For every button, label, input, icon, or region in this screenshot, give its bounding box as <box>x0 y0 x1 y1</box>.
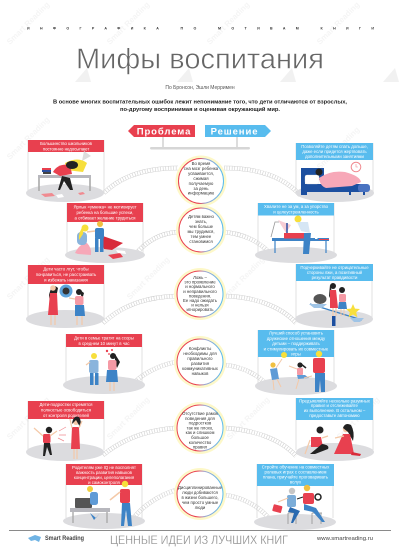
circle: myth 3: Ложь – <box>193 275 208 280</box>
watermark pattern: Smart Reading <box>315 125 361 171</box>
problem 2 text: а отбивает желание трудиться <box>74 216 136 220</box>
watermark pattern <box>5 0 399 441</box>
circle: myth 1 <box>176 156 226 206</box>
circle: myth 3 <box>174 268 226 320</box>
brand name: Smart Reading <box>45 536 84 542</box>
problem 5 text <box>28 401 104 419</box>
title: Мифы воспитания <box>76 44 324 76</box>
problem 1 text <box>28 140 104 152</box>
panel: solution 6 <box>254 464 336 530</box>
panel: problem 4 <box>63 334 145 394</box>
circle: myth 3: и неправильного <box>183 289 217 294</box>
panel: solution 4 <box>255 330 337 395</box>
circle: myth 5: как и слишком <box>186 430 214 435</box>
circle: myth 1: получаемую <box>189 181 214 186</box>
circle: myth 5: количество <box>189 440 212 445</box>
panel: problem 6 <box>63 464 145 529</box>
problem 3 text: Дети часто лгут, чтобы <box>43 266 89 272</box>
circle: myth 5: Отсутствие рамок <box>182 411 218 416</box>
solution 1 text: Позволяйте детям спать дольше, <box>301 144 368 149</box>
circle: myth 1: информацию <box>188 190 215 196</box>
watermark pattern: Smart Reading <box>5 0 51 46</box>
circle: myth 4: Конфликты <box>189 346 211 351</box>
footer <box>9 530 391 547</box>
column headers <box>128 125 271 150</box>
circle: myth 5: большое <box>191 435 209 440</box>
circle: myth 4: правильного <box>187 356 213 361</box>
solution 6 text <box>257 464 334 486</box>
solution 2 text: Хвалите не за ум, а за упорство <box>264 204 329 209</box>
panel: problem 5 <box>26 401 104 461</box>
illustration: family playing with a ball <box>270 351 325 392</box>
solution 4 text: дружеские отношения между <box>267 336 326 341</box>
circle: myth 6 <box>174 468 226 520</box>
illustration: teen and mother talking on floor <box>305 424 361 456</box>
circle: myth 2: становимся <box>189 239 213 244</box>
solution 5 text: Предъявляйте несколько разумных <box>299 398 371 404</box>
illustration: child working at desk <box>271 216 329 254</box>
illustration: student asleep at desk <box>38 151 91 198</box>
problem 1 text: постоянно недосыпают <box>43 146 89 152</box>
solution 6 text: плана, приучайте проговаривать <box>263 474 329 480</box>
solution 6 text: Стройте обучение на совместных <box>262 464 330 470</box>
top caption: ИНФОГРАФИКА ПО МОТИВАМ КНИГИ <box>27 26 374 30</box>
problem 3 text: и избежать наказания <box>44 278 89 282</box>
intro text <box>53 98 347 113</box>
illustration: arguing siblings <box>86 349 120 391</box>
circle: myth 4: развития <box>191 361 210 366</box>
watermark pattern: Smart Reading <box>105 395 151 441</box>
circle: myth 5 <box>174 402 226 454</box>
circle: myth 2: Детям важно <box>188 214 215 219</box>
problem 4 text: в среднем 10 минут в час <box>78 341 130 346</box>
website: www.smartreading.ru <box>317 536 373 542</box>
problem 6 text: концентрации, целеполагания <box>74 475 135 480</box>
circle: myth 2 <box>176 205 226 255</box>
circle: myth 2: тем умнее <box>191 234 212 239</box>
banner: problem: Проблема <box>137 126 191 138</box>
panel: solution 5 <box>296 398 374 461</box>
panel: problem 1 <box>26 140 104 202</box>
circle: myth 6: Дисциплинированные <box>178 485 223 490</box>
watermark pattern: Smart Reading <box>105 0 151 46</box>
watermark pattern: Smart Reading <box>5 255 51 301</box>
circle: myth 5: подростков <box>189 421 212 426</box>
solution 5 text <box>296 398 373 420</box>
circle: myth 6: чем просто умные <box>182 500 219 505</box>
panel: solution 1 <box>296 143 374 202</box>
panel: solution 3 <box>295 264 373 328</box>
problem 2 text: ребенка на большие успехи, <box>77 210 133 215</box>
illustration: mother and boy with cape <box>75 221 126 259</box>
circle: myth 1: Во время <box>192 161 211 166</box>
solution 6 text: вслух <box>290 480 302 484</box>
circle: myth 4 <box>174 336 226 388</box>
panel: problem 3 <box>26 265 104 328</box>
watermark pattern: Smart Reading <box>205 0 251 46</box>
circle: myth 4: коммуникативных <box>182 366 219 371</box>
intro text: В основе многих воспитательных ошибок лежит непонимание того, что дети отличаются от взрослых, <box>53 98 347 106</box>
circle: myth 5: правил <box>193 445 208 450</box>
solution 5 text: их выполнение. В остальном – <box>304 408 366 413</box>
problem 5 text: полностью освободиться <box>41 408 92 412</box>
tagline: ЦЕННЫЕ ИДЕИ ИЗ ЛУЧШИХ КНИГ <box>110 533 288 547</box>
circle: myth 5: так же плохо, <box>187 425 213 430</box>
problem 2 text: Ярлык «умника» не мотивирует <box>73 204 137 210</box>
circle: myth 1: за день <box>193 186 209 191</box>
solution 4 text: и стимулировать их совместные <box>264 346 329 351</box>
illustration: mother and girl with thought bubble <box>48 284 85 325</box>
circle: myth 2: чем больше <box>189 224 214 229</box>
problem 5 text: от контроля родителей <box>43 413 90 418</box>
panel: problem 2 <box>65 203 145 263</box>
problem 6 text: Родителям уже IQ не восполнят <box>72 465 136 470</box>
problem 6 text <box>66 464 142 485</box>
illustration: teen arguing with mother <box>34 417 82 459</box>
circle: myth 6: люди добиваются <box>182 490 218 495</box>
panel: solution 2 <box>255 203 337 263</box>
problem 6 text: важность развития навыков <box>76 470 133 475</box>
solution 4 text: детьми – поддерживать <box>272 341 321 346</box>
problem 5 text: Дети-подростки стремятся <box>39 402 93 407</box>
icon: book logo <box>28 535 41 542</box>
circle: myth 6: в жизни большего, <box>181 495 219 500</box>
solution 5 text: правил и отслеживайте <box>311 403 359 408</box>
circle: myth 2: знать, <box>195 219 207 224</box>
circle: myth 3: поведения. <box>189 293 211 298</box>
illustration: child sleeping in bed <box>301 162 370 195</box>
solution 2 text: и целеустремленность <box>273 210 319 214</box>
watermark pattern: Smart Reading <box>125 255 171 301</box>
circle: myth 1: усваивается, <box>188 171 214 176</box>
solution 4 text: игры <box>291 352 301 356</box>
solution 3 text: стороны лжи, а позитивный <box>307 270 363 275</box>
solution 4 text: Лучший способ установить <box>269 330 324 336</box>
solution 1 text: даже если придется жертвовать <box>302 149 367 154</box>
circle: myth 3: игнорировать <box>186 307 214 312</box>
circle: myth 3: это проявление <box>184 280 216 285</box>
circle: myth 3: и нормального <box>185 284 215 289</box>
watermark pattern: Smart Reading <box>315 0 361 46</box>
solution 1 text <box>296 143 373 160</box>
circle: myth 2: мы трудимся, <box>187 229 215 234</box>
illustration: children playing doctor <box>272 485 325 524</box>
circle: myth 1: сна мозг ребенка <box>184 166 219 171</box>
circle: myth 4: необходимы для <box>183 351 217 356</box>
watermark pattern: Smart Reading <box>5 115 51 161</box>
solution 3 text <box>296 264 373 281</box>
circle: myth 1: сжимая <box>193 176 209 181</box>
solution 6 text: ролевых играх с составлением <box>265 470 327 474</box>
solution 2 text <box>258 203 334 216</box>
watermark pattern: Smart Reading <box>5 395 51 441</box>
solution 5 text: предоставьте автономию <box>309 413 360 418</box>
solution 3 text: Подчеркивайте не отрицательные <box>300 265 369 270</box>
connecting tracks <box>103 168 300 521</box>
solution 3 text: результат правдивости <box>312 275 358 280</box>
solution 4 text <box>258 330 334 357</box>
watermark pattern: Smart Reading <box>335 395 381 441</box>
solution 1 text: дополнительными занятиями <box>305 154 365 159</box>
problem 1 text: Большинство школьников <box>40 141 93 146</box>
illustration: scales with rock and star <box>309 283 364 326</box>
circle: myth 4: навыков <box>192 371 209 376</box>
problem 4 text <box>66 334 142 347</box>
problem 4 text: Дети в семье тратят на ссоры <box>74 336 134 340</box>
illustration: teen at laptop and parent <box>70 481 132 526</box>
problem 2 text <box>67 203 143 222</box>
problem 3 text: понравиться, не расстраивать <box>36 272 97 277</box>
circle: myth 3: и нельзя <box>191 303 209 308</box>
banner: solution <box>205 125 271 138</box>
watermark pattern: Smart Reading <box>220 255 266 301</box>
circle: myth 3: Ее надо ожидать <box>183 298 218 303</box>
problem 3 text <box>28 265 104 284</box>
banner: solution: Решение <box>211 126 258 138</box>
circle: myth 5: поведения для <box>185 416 216 421</box>
author: По Бронсон, Эшли Мерримен <box>165 85 235 91</box>
intro text: по-другому воспринимая и оценивая окружающий мир. <box>120 106 280 113</box>
watermark pattern: Smart Reading <box>225 395 271 441</box>
problem 6 text: и самоконтроля <box>88 480 120 485</box>
circle: myth 6: люди <box>195 505 206 510</box>
